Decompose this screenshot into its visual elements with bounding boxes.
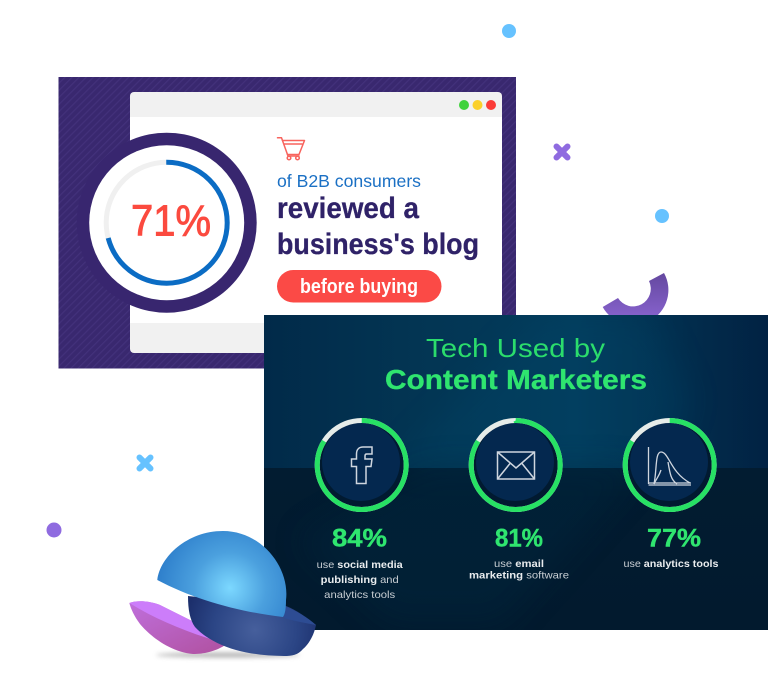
text: of B2B consumers: of B2B consumers xyxy=(277,171,421,191)
decorative blue dot right xyxy=(655,209,669,223)
pink half bowl xyxy=(129,601,230,654)
blue dome xyxy=(157,531,286,617)
ring 84% with facebook icon xyxy=(317,420,406,510)
caption xyxy=(317,559,403,601)
panel: Tech Used by Content Marketers xyxy=(264,315,768,630)
percentage: 71% xyxy=(131,196,211,246)
caption: publishing and xyxy=(321,574,399,586)
stat: email xyxy=(469,420,569,582)
floor shadow xyxy=(156,652,300,658)
caption: analytics tools xyxy=(324,589,395,601)
decorative purple arc xyxy=(603,273,668,325)
heading: Tech Used by xyxy=(426,333,605,363)
decorative blue dot top xyxy=(502,24,516,38)
3D split sphere illustration xyxy=(129,531,316,658)
caption: use social media xyxy=(317,559,403,571)
pink bowl inner surface xyxy=(129,601,230,644)
decorative purple cross xyxy=(556,146,568,158)
ring 77% with chart icon xyxy=(625,420,714,510)
navy disc xyxy=(188,596,316,656)
caption: marketing software xyxy=(469,570,569,582)
icon: shopping cart xyxy=(278,138,304,160)
decorative purple dot left xyxy=(46,522,62,538)
text: business's blog: business's blog xyxy=(277,228,479,261)
window buttons xyxy=(459,100,496,110)
caption xyxy=(469,558,569,582)
caption: use email xyxy=(494,558,544,570)
decorative blue cross xyxy=(140,458,150,468)
icon: distribution chart xyxy=(648,447,691,485)
text: reviewed a: reviewed a xyxy=(277,192,419,225)
heading xyxy=(385,333,647,395)
icon: facebook f xyxy=(352,447,372,484)
value: 77% xyxy=(647,524,701,552)
pill: before buying: before buying xyxy=(300,275,418,298)
pill: before buying xyxy=(277,270,442,302)
navy disc top surface xyxy=(283,606,316,625)
panel: B2B blog statistic xyxy=(58,77,516,368)
progress ring 71% xyxy=(77,133,257,313)
stat: analytics xyxy=(624,420,719,570)
heading: Content Marketers xyxy=(385,364,647,395)
caption: use analytics tools xyxy=(624,558,719,570)
dark background xyxy=(264,315,768,630)
value: 84% xyxy=(332,524,387,552)
stat: social media xyxy=(317,420,406,601)
browser window xyxy=(130,92,502,353)
ring 81% with envelope icon xyxy=(471,420,560,510)
purple hatched background xyxy=(58,77,516,368)
value: 81% xyxy=(495,524,543,552)
icon: envelope xyxy=(498,452,534,479)
